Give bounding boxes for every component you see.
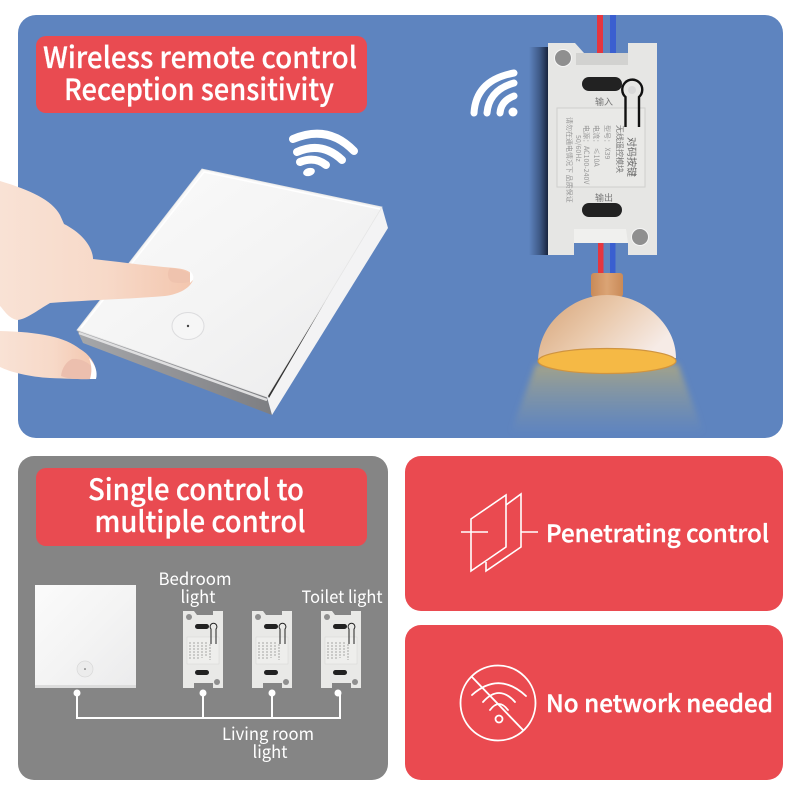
label: toilet light: Toilet light <box>302 583 383 608</box>
wireless receiver module: 50/60Hz <box>573 135 583 162</box>
label: living room light: Living room <box>222 720 314 745</box>
switch front view <box>35 585 136 688</box>
wireless receiver module: 输出 <box>595 191 613 204</box>
light beam <box>510 364 704 434</box>
icon: wifi signal above switch <box>293 134 354 177</box>
icon: wifi crossed out <box>460 666 536 740</box>
text: penetrating control: Penetrating control <box>546 514 769 549</box>
wireless receiver module: 对码按键 <box>625 137 640 177</box>
wireless receiver module <box>548 43 657 255</box>
label: bedroom light: Bedroom <box>158 565 232 590</box>
hand: lower finger <box>0 331 96 379</box>
wireless receiver module: 输入 <box>595 95 613 108</box>
label: bedroom light <box>158 565 232 608</box>
module: living room <box>252 611 292 688</box>
module shadow <box>529 47 549 255</box>
connector lines <box>74 690 342 718</box>
label: living room light <box>222 720 314 763</box>
fingernails <box>61 268 193 379</box>
panel: no network needed <box>405 625 783 780</box>
heading: single control: Single control to <box>88 467 304 509</box>
wireless receiver module: 请勿在通电情况下 品质保证 <box>564 117 574 203</box>
wires: top <box>597 15 616 55</box>
panel: single control to multiple control <box>18 456 388 780</box>
icon: touch button <box>172 312 204 340</box>
pendant lamp <box>510 273 704 434</box>
wireless receiver module: 型号： X39 <box>602 125 612 159</box>
panel: blue wireless remote panel <box>18 15 783 438</box>
module: toilet <box>321 611 361 688</box>
wireless receiver module: 电流： ≤10A <box>591 125 601 167</box>
hand: pointing finger <box>0 181 193 320</box>
label: living room light: light <box>252 738 288 763</box>
label: bedroom light: light <box>180 583 216 608</box>
wireless receiver module: 无线遥控模块 <box>614 125 625 173</box>
text: no network needed: No network needed <box>546 684 773 719</box>
wall switch panel <box>77 169 388 415</box>
heading: wireless remote control <box>36 35 367 113</box>
module: bedroom <box>183 611 223 688</box>
heading: wireless remote control: Reception sensitivity <box>64 67 334 109</box>
heading: wireless remote control: Wireless remote control <box>43 35 357 77</box>
small receiver modules <box>183 611 361 688</box>
heading: single control <box>36 467 367 546</box>
wireless receiver module: 电源：AC100-240V <box>581 125 591 185</box>
heading: single control: multiple control <box>94 499 306 541</box>
icon: penetrating sheets <box>461 494 538 571</box>
wires: bottom to lamp <box>598 240 616 274</box>
icon: wifi signal beside module <box>474 73 518 116</box>
panel: penetrating control <box>405 456 783 611</box>
